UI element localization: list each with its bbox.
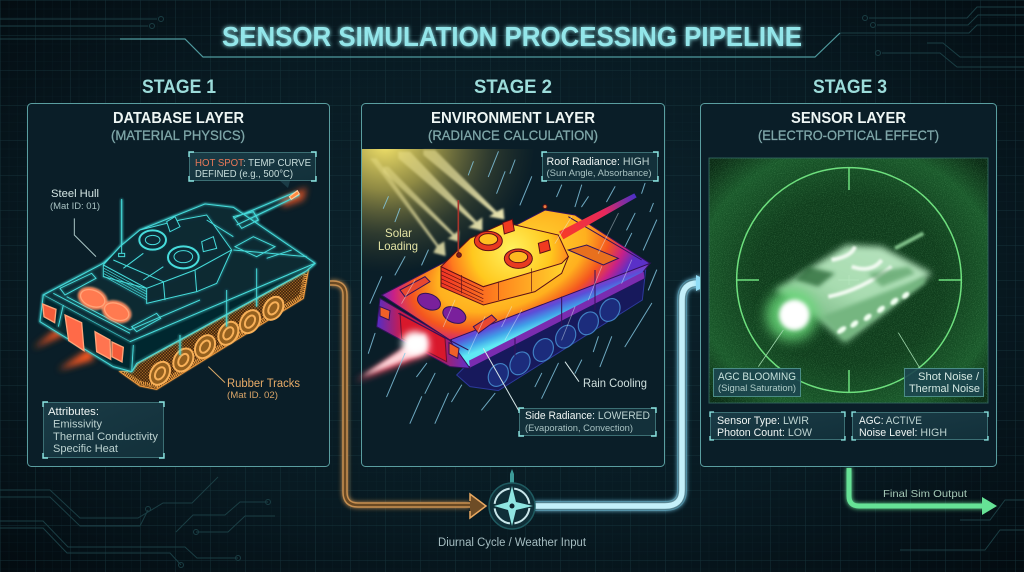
box: agc status: Noise Level: HIGH (859, 427, 947, 439)
callout: hot spot (189, 152, 316, 188)
arrow: final sim output (849, 468, 997, 515)
callout: agc blooming: AGC BLOOMING (718, 371, 796, 383)
label: rubber tracks: (Mat ID. 02) (227, 390, 278, 401)
rubber tracks (120, 268, 309, 389)
callout: roof radiance: Roof Radiance: HIGH (546, 156, 650, 168)
callout: shot noise: Shot Noise / (918, 371, 980, 383)
arrow: database to weather node (330, 283, 486, 518)
sensor noise (709, 158, 988, 403)
arrow: weather node to sensor layer (534, 275, 712, 506)
sunlight glow (362, 149, 522, 262)
label: final sim output: Final Sim Output (883, 488, 967, 500)
label: steel hull (50, 188, 100, 211)
box: agc status: AGC: ACTIVE (859, 415, 922, 427)
label: steel hull: Steel Hull (51, 188, 99, 200)
box: agc status (852, 412, 988, 440)
box: attributes: Thermal Conductivity (53, 431, 158, 443)
callout: hot spot: HOT SPOT: TEMP CURVE (195, 157, 311, 169)
callout: roof radiance: (Sun Angle, Absorbance) (546, 168, 652, 179)
title with header rule: SENSOR SIMULATION PROCESSING PIPELINE (222, 21, 802, 52)
box: attributes: Emissivity (53, 418, 102, 430)
tracks and wheels (457, 270, 646, 391)
tank thermal (355, 150, 657, 423)
box: sensor type: Photon Count: LOW (717, 427, 813, 439)
callout: hot spot: DEFINED (e.g., 500°C) (195, 168, 293, 180)
callout: shot noise: Thermal Noise (909, 383, 980, 395)
callout: roof radiance (542, 152, 658, 181)
subheading: radiance calculation: (RADIANCE CALCULATION) (428, 127, 598, 143)
agc bloom (766, 289, 818, 341)
hull (377, 210, 650, 368)
hot barrel tip (289, 191, 299, 199)
label: solar loading: Loading (378, 239, 418, 253)
leader lines (74, 218, 96, 257)
callout: side radiance: (Evaporation, Convection) (525, 423, 633, 434)
box: attributes: Specific Heat (53, 443, 118, 455)
callout: agc blooming: (Signal Saturation) (718, 383, 796, 394)
label: solar loading (378, 226, 418, 253)
turret (441, 193, 637, 305)
icon: diurnal cycle node (489, 469, 535, 529)
label: steel hull: (Mat ID: 01) (50, 201, 100, 211)
panel: environment layer (355, 104, 664, 466)
solar rays (370, 150, 504, 256)
subheading: electro-optical effect: (ELECTRO-OPTICAL EFFECT) (758, 127, 939, 143)
box: sensor type (710, 412, 845, 440)
label: rubber tracks: Rubber Tracks (227, 378, 300, 390)
label: solar loading: Solar (385, 226, 412, 240)
heading: sensor layer: SENSOR LAYER (791, 110, 906, 127)
exhaust flare (355, 331, 432, 382)
callout: side radiance (519, 408, 656, 436)
box: attributes (43, 402, 164, 458)
leader lines (483, 348, 579, 412)
steel hull (40, 192, 315, 372)
stage 3 heading: STAGE 3 (813, 77, 887, 98)
panel: sensor layer (700, 104, 996, 466)
box: sensor type: Sensor Type: LWIR (717, 415, 809, 427)
tank wireframe (33, 187, 315, 389)
scope view (709, 158, 988, 403)
callout: agc blooming (714, 368, 800, 396)
label: weather input: Diurnal Cycle / Weather Input (438, 537, 587, 549)
label: rubber tracks (227, 378, 300, 401)
panel: database layer (28, 104, 330, 466)
heading: database layer: DATABASE LAYER (113, 110, 244, 127)
subheading: material physics: (MATERIAL PHYSICS) (111, 127, 245, 143)
callout: side radiance: Side Radiance: LOWERED (525, 410, 650, 422)
stage 1 heading: STAGE 1 (142, 77, 216, 98)
exhaust flares (33, 187, 307, 370)
rain streaks (368, 152, 657, 423)
blurred sensor tank (775, 233, 932, 343)
stage 2 heading: STAGE 2 (474, 77, 552, 98)
box: attributes: Attributes: (48, 406, 99, 418)
label: rain cooling: Rain Cooling (583, 376, 647, 390)
rain streaks over tank (402, 213, 632, 353)
callout: shot noise (904, 368, 984, 396)
heading: environment layer: ENVIRONMENT LAYER (431, 110, 595, 127)
hot panels (43, 284, 134, 362)
reticle (737, 168, 961, 392)
